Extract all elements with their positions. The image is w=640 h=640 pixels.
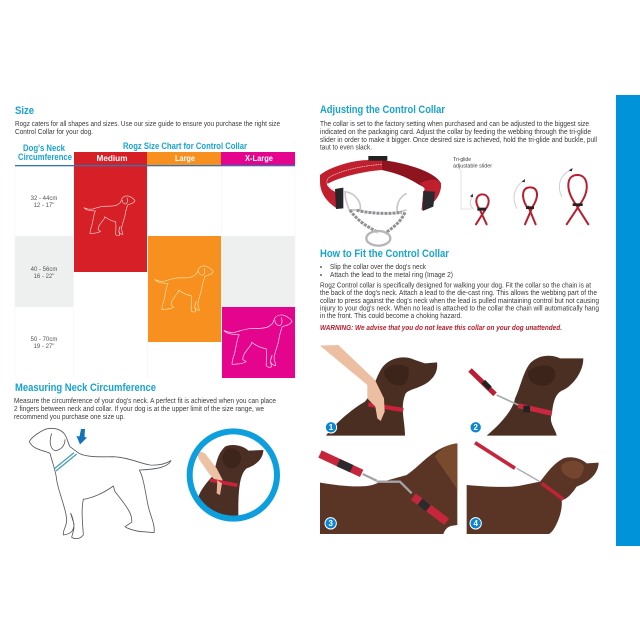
text block: size intro: Rogz caters for all shapes and sizes. Use our size guide to ensure you purchase the right size <box>15 121 280 128</box>
text block: measuring instructions: 2 fingers between neck and collar. If your dog is at the upper limit of the size range, we <box>14 406 264 413</box>
panel: measuring neck circumference <box>14 382 277 539</box>
step badge 1: 1 <box>329 423 334 432</box>
chart heading: neck circumference <box>18 143 72 162</box>
chart heading: neck circumference: Circumference <box>18 152 72 162</box>
label: tri-glide adjustable slider: Tri-glide <box>453 157 471 163</box>
warning text: WARNING: We advise that you do not leave this collar on your dog unattended. <box>320 325 562 332</box>
bullet list: Slip the collar over the dog's neck <box>330 264 426 271</box>
step badge 3: 3 <box>328 519 333 528</box>
chart heading: neck circumference: Dog's Neck <box>23 143 66 153</box>
photo: hand checking collar fit in blue ring <box>190 431 277 519</box>
panel: how to fit the control collar <box>320 248 599 534</box>
photo 1: hand slipping collar over neck <box>320 345 437 436</box>
text block: measuring instructions: Measure the circumference of your dog's neck. A perfect fit is achieved when you can place <box>14 398 276 405</box>
heading: how to fit the control collar: How to Fit the Control Collar <box>320 248 450 260</box>
photo 4: dog wearing collar with lead <box>467 443 599 534</box>
text block: fitting instructions: injury to your dog's neck. When no lead is attached to the collar the chain will automatically hang <box>320 306 599 312</box>
row labels: 12 - 17" <box>34 203 54 209</box>
column: x-large <box>221 152 295 378</box>
text block: fitting instructions: in the front. This could become a choking hazard. <box>320 313 462 320</box>
photo 2: lead attached to metal ring <box>470 356 583 436</box>
row labels: 40 - 56cm <box>31 267 57 273</box>
text block: fitting instructions <box>320 282 599 320</box>
label: tri-glide adjustable slider: adjustable slider <box>453 164 492 170</box>
column: medium: Medium <box>96 153 128 163</box>
icon: dog outline medium <box>84 196 135 236</box>
text block: fitting instructions: collar to press against the dog's neck when the lead is pulled maintaining control but not causing <box>320 298 599 305</box>
icon: blue arrow pointing to neck <box>76 429 87 444</box>
text block: adjusting instructions: The collar is set to the factory setting when purchased and can be adjusted to the biggest size <box>320 121 589 128</box>
text block: measuring instructions: recommend you purchase one size up. <box>14 414 125 421</box>
row labels <box>31 196 57 350</box>
text block: measuring instructions <box>14 398 276 421</box>
column: medium <box>74 152 147 272</box>
text block: adjusting instructions: slider in order to make it bigger. Once desired size is achieved, hold the tri-glide and buckle, pull <box>320 137 597 144</box>
column: large: Large <box>175 153 195 163</box>
heading: Size: Size <box>15 105 34 117</box>
row labels: 32 - 44cm <box>31 196 57 202</box>
step badge 2: 2 <box>473 423 478 432</box>
text block: fitting instructions: the back of the dog's neck. Attach a lead to the die-cast ring. This allows the webbing part of the <box>320 290 597 297</box>
chart heading: size chart title: Rogz Size Chart for Control Collar <box>123 141 247 151</box>
panel: adjusting the control collar <box>320 104 597 246</box>
text block: size intro: Control Collar for your dog. <box>15 129 93 136</box>
row labels: 16 - 22" <box>34 274 54 280</box>
heading: measuring neck circumference: Measuring Neck Circumference <box>15 382 156 394</box>
photo 3: close-up of chain and lead <box>320 443 457 534</box>
text block: adjusting instructions: taut to even slack. <box>320 144 372 152</box>
column: x-large: X-Large <box>245 153 273 163</box>
illustration: tri-glide adjustable slider steps <box>453 157 588 224</box>
column: large <box>147 152 221 342</box>
heading: adjusting the control collar: Adjusting the Control Collar <box>320 104 446 116</box>
panel: size section <box>15 105 295 378</box>
step badge 4: 4 <box>473 519 478 528</box>
text block: size intro <box>15 121 280 136</box>
bullet list: Attach the lead to the metal ring (Image 2) <box>330 272 453 279</box>
icon: dog outline x-large <box>224 315 292 367</box>
row labels: 50 - 70cm <box>31 337 57 343</box>
icon: dog outline large <box>155 266 213 312</box>
bullet list <box>320 264 453 279</box>
row labels: 19 - 27" <box>34 344 54 350</box>
image: red control collar with chain <box>320 156 441 246</box>
illustration: dog outline with collar <box>29 428 171 539</box>
text block: fitting instructions: Rogz Control collar is specifically designed for walking your dog. Fit the collar so the chain is at <box>320 282 591 290</box>
text block: adjusting instructions: indicated on the packaging card. Adjust the collar by feeding the webbing through the tri-glide <box>320 129 591 136</box>
size chart <box>15 140 295 378</box>
label: tri-glide adjustable slider <box>453 157 492 170</box>
blue side bar <box>616 95 640 546</box>
collar loops <box>470 168 588 224</box>
text block: adjusting instructions <box>320 121 597 152</box>
